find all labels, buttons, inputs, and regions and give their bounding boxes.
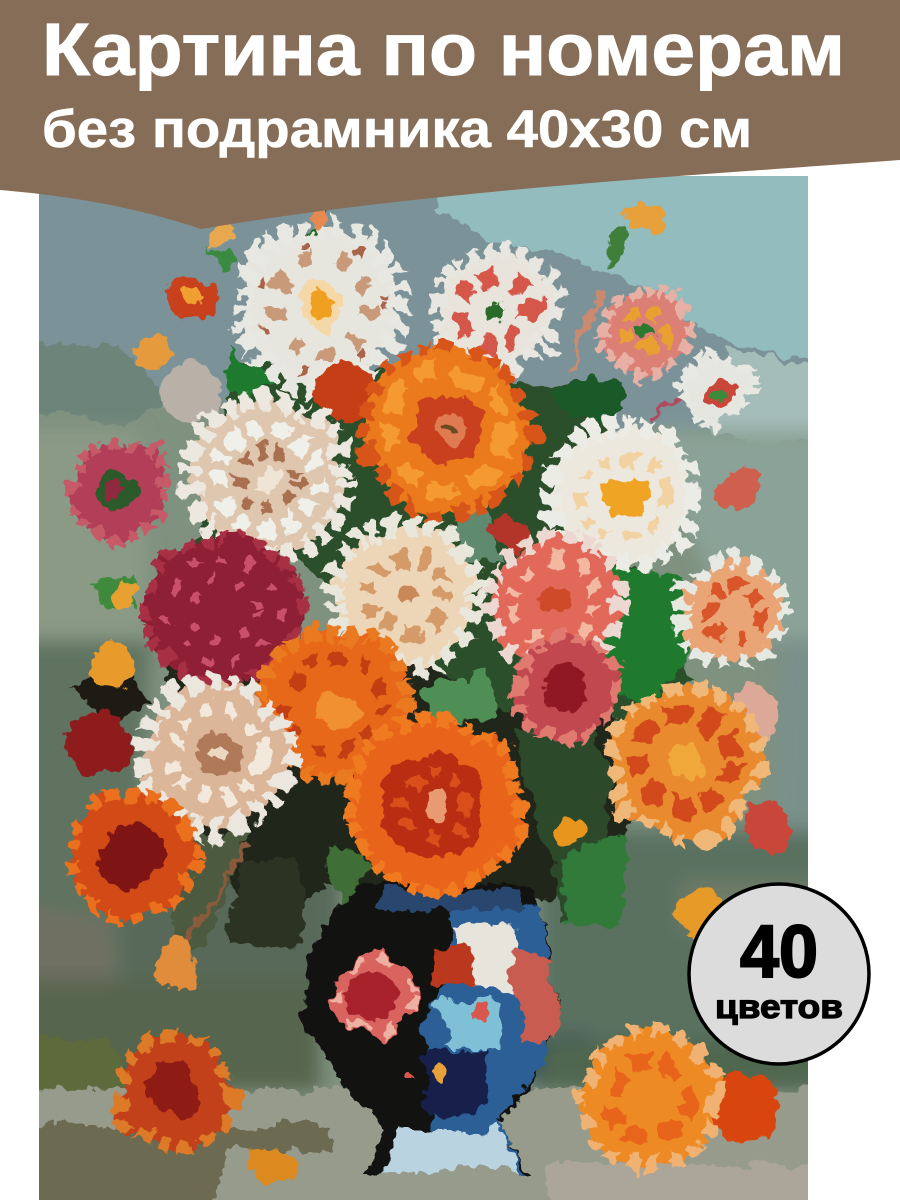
flower: red cluster left	[68, 713, 132, 777]
flower: white and orange dahlia right	[678, 556, 786, 664]
flower: red and pink dahlia	[513, 636, 617, 740]
flower: white daisy dahlia	[550, 425, 694, 569]
top banner	[0, 0, 900, 229]
flower: white dahlia top	[244, 227, 400, 383]
flower: orange and white dahlia right	[609, 686, 761, 838]
flower: small white dahlia right	[686, 359, 748, 421]
flower: pink dahlia left	[70, 442, 166, 538]
flower: bottom right fallen dahlias	[580, 1030, 781, 1170]
flower: cream dahlia	[333, 523, 477, 667]
flower: large orange dahlia	[363, 346, 531, 514]
flower: orange dahlia centre left	[259, 629, 411, 781]
painted subject	[64, 198, 790, 1183]
badge: 40 colours	[689, 884, 869, 1064]
flower: white petals behind right	[729, 689, 781, 741]
buds	[92, 198, 790, 1183]
flower: orange red dahlia centre	[349, 719, 521, 891]
flower: pink and green dahlia	[603, 288, 687, 372]
foliage and stems	[64, 215, 700, 950]
flower: red dahlia left	[70, 793, 194, 917]
flower: white and red dahlia	[437, 250, 557, 370]
flower: red small behind	[315, 362, 375, 422]
painting background	[39, 176, 808, 1200]
badge: 40 colours: 40	[740, 910, 818, 993]
vase	[305, 885, 555, 1170]
painting: dahlias in a vase	[39, 176, 808, 1200]
flower: pink and white dahlia	[489, 534, 621, 666]
badge: 40 colours: цветов	[715, 988, 843, 1025]
flower: beige and white dahlia	[142, 682, 288, 828]
subtitle: без подрамника 40х30 см	[42, 100, 752, 159]
flower: bottom left fallen dahlia	[119, 1036, 231, 1148]
title: Картина по номерам	[42, 8, 845, 91]
flower: dark crimson dahlia	[148, 534, 300, 686]
flower: white and brown dahlia	[190, 400, 346, 556]
